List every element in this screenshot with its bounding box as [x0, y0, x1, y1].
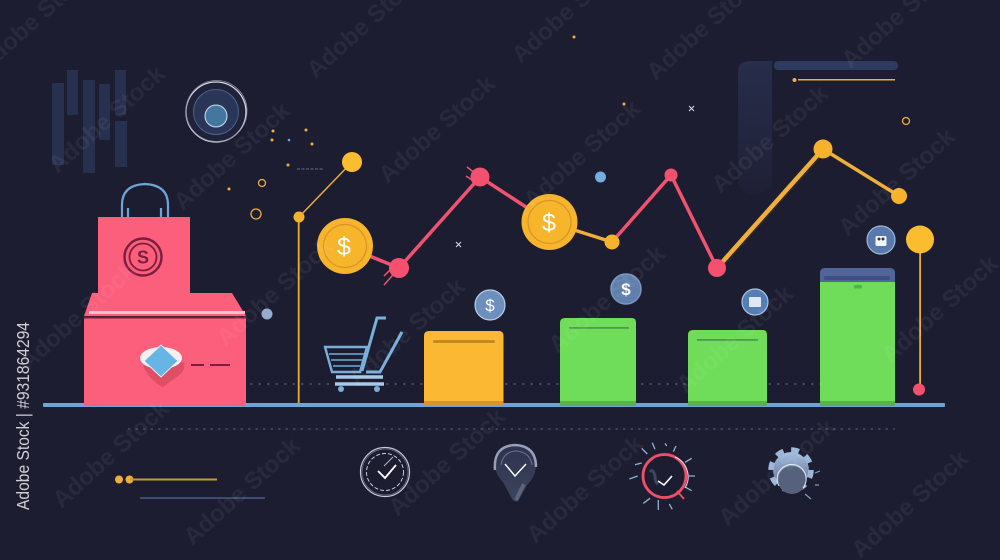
- pole with yellow node: [294, 152, 362, 403]
- icon: gear: [771, 450, 820, 499]
- bar: tall green with blue cap: [820, 268, 895, 406]
- stock id side label: Adobe Stock | #931864294: [13, 322, 33, 510]
- watermarks: Adobe Stock: [671, 280, 799, 399]
- dotted guide lines: [128, 384, 895, 429]
- yellow segments: [549, 222, 612, 242]
- watermarks: Adobe Stock: [178, 432, 306, 551]
- watermarks: Adobe Stock: [521, 430, 649, 549]
- watermarks: Adobe Stock: [713, 413, 841, 532]
- icon: gold dollar coin left: [317, 218, 373, 274]
- watermarks: Adobe Stock: [343, 273, 471, 392]
- icon: blue coin two: $: [621, 280, 631, 299]
- lollipop marker right: [906, 226, 934, 396]
- scattered dots and rings: [228, 36, 910, 320]
- red segments: [345, 177, 549, 268]
- red box: [84, 293, 246, 406]
- icon: gold dollar coin center: $: [542, 209, 556, 237]
- top right decorative panel: [738, 61, 898, 194]
- bar: green two: [688, 330, 767, 406]
- watermarks: Adobe Stock: [43, 60, 171, 179]
- icon: shopping cart: [325, 318, 402, 392]
- watermarks: Adobe Stock: [383, 403, 511, 522]
- watermarks: Adobe Stock: [211, 233, 339, 352]
- icon: blue coin one: $: [485, 296, 495, 315]
- watermarks: Adobe Stock: [14, 257, 142, 376]
- bag coin emblem: S: [137, 248, 149, 268]
- watermarks: Adobe Stock: [876, 250, 1000, 369]
- icon: diamond label: [140, 345, 184, 387]
- watermarks: Adobe Stock: [846, 445, 974, 560]
- line chart: [345, 140, 907, 285]
- shopping bag: [98, 184, 190, 296]
- bar: yellow: [424, 331, 504, 406]
- watermarks: Adobe Stock: [373, 70, 501, 189]
- icon: gold dollar coin center: [522, 194, 578, 250]
- legend line bottom left: [115, 476, 265, 499]
- icon: gold dollar coin left: $: [337, 233, 351, 261]
- bag handle: [122, 184, 168, 217]
- decorative bars top left: [52, 70, 127, 173]
- icon: blue coin card: [742, 289, 768, 315]
- watermarks: Adobe Stock: [518, 95, 646, 214]
- icon: red ring check with rays: [629, 443, 695, 510]
- chart nodes: [389, 140, 907, 278]
- watermarks: Adobe Stock: [833, 123, 961, 242]
- icon: blue coin robot: [867, 226, 895, 254]
- watermarks: Adobe Stock: [168, 97, 296, 216]
- icon: check badge: [360, 448, 410, 496]
- watermarks: Adobe Stock: [543, 240, 671, 359]
- watermarks: Adobe Stock: [706, 80, 834, 199]
- icon: location pin check: [495, 444, 536, 502]
- bar: green one: [560, 318, 636, 406]
- icon: target circle: [186, 80, 247, 142]
- icon: blue coin two: [611, 274, 641, 304]
- baseline: [43, 403, 945, 407]
- watermarks: Adobe Stock: [47, 395, 175, 514]
- icon: blue coin one: [475, 290, 505, 320]
